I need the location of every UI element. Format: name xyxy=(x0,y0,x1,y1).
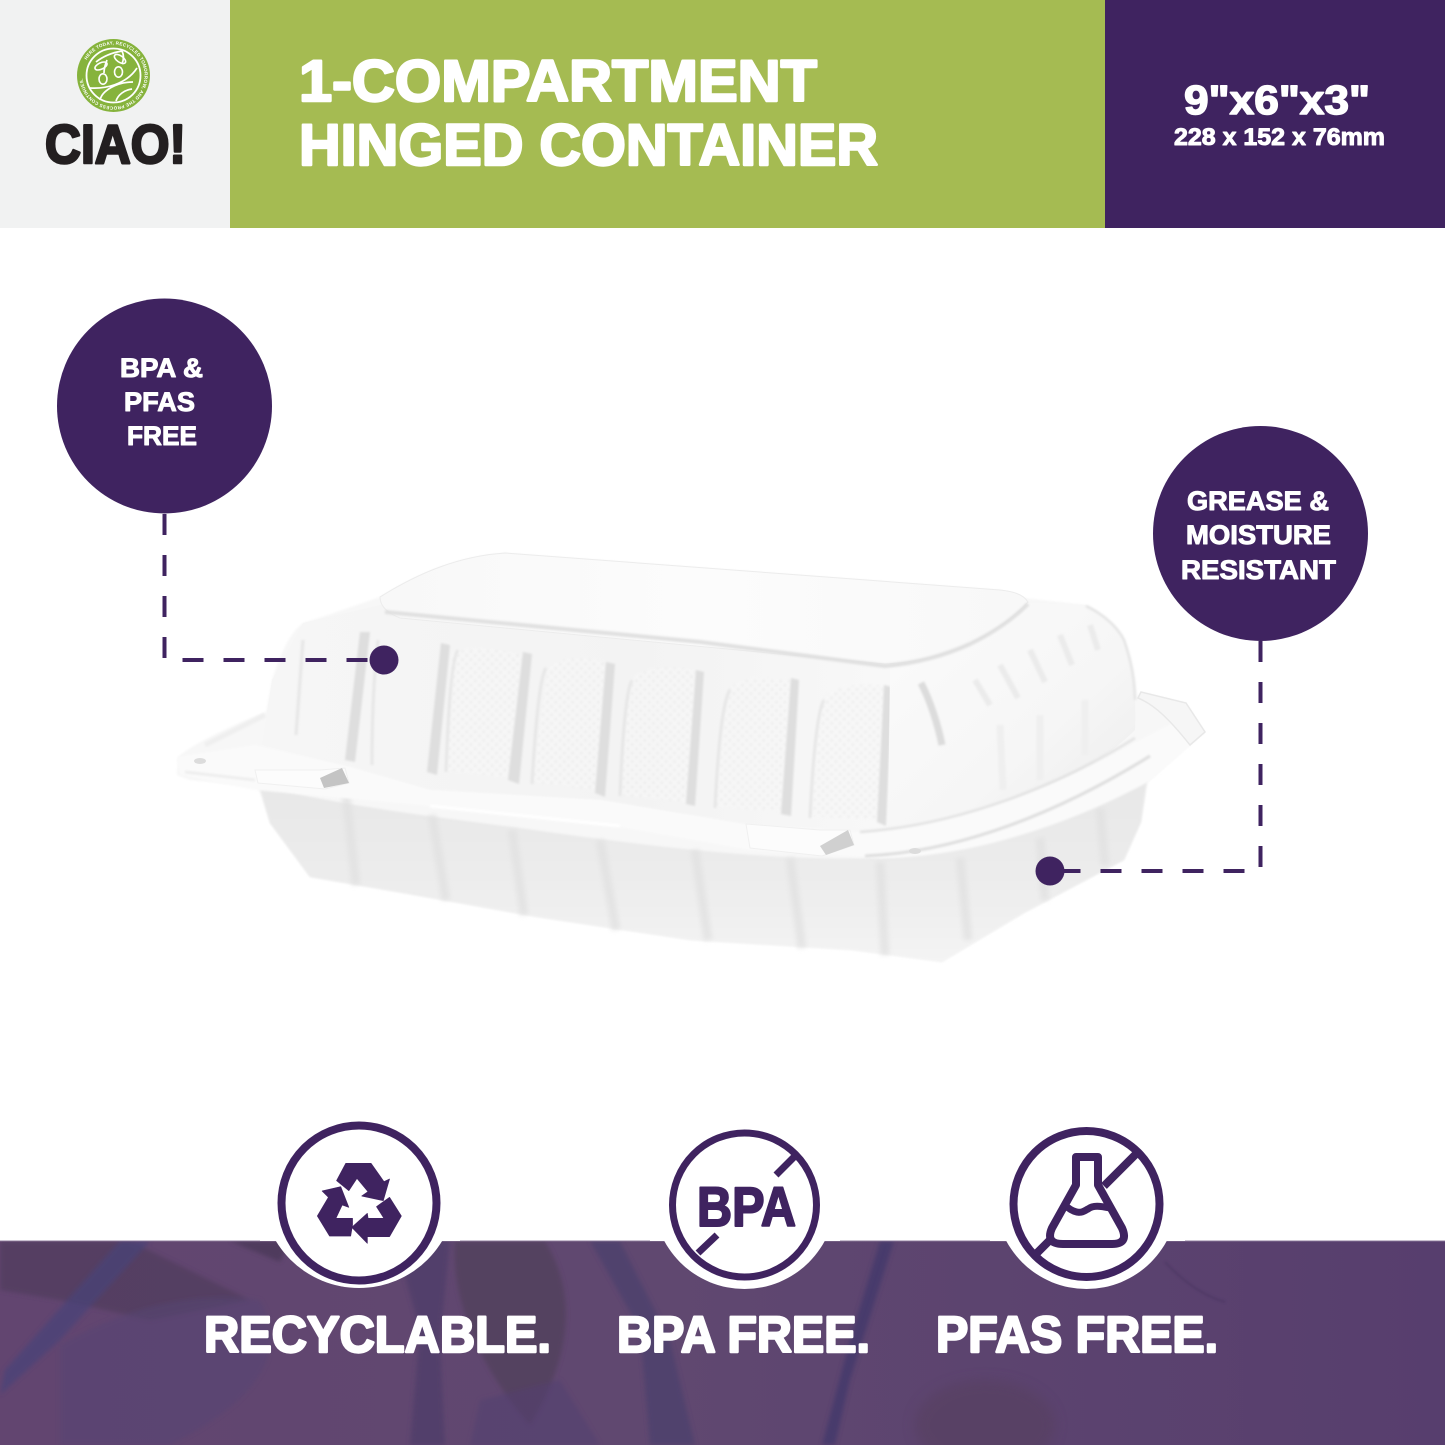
callout text: MOISTURE xyxy=(1186,520,1331,550)
callout text: FREE xyxy=(127,421,197,451)
label: PFAS free: PFAS FREE. xyxy=(936,1306,1218,1363)
leader dot xyxy=(1036,856,1064,886)
lid right end xyxy=(888,603,1135,830)
lid front wall xyxy=(262,605,890,830)
band top hairline xyxy=(0,1240,1445,1241)
badge: PFAS free xyxy=(990,1100,1185,1289)
badge halo xyxy=(996,1107,1178,1289)
label: BPA free: BPA FREE. xyxy=(617,1306,870,1363)
icon: olive seal logo: HERE TODAY, RECYCLED TOMORROW, AND THE PROCESS CONTINUES. xyxy=(80,41,148,110)
callout text: PFAS xyxy=(124,387,195,417)
callout text: RESISTANT xyxy=(1181,555,1337,585)
silhouette xyxy=(177,553,1205,962)
dimensions in inches: 9"x6"x3" xyxy=(1184,77,1370,123)
callout: grease and moisture resistant xyxy=(1036,426,1368,886)
icon: recycling arrows xyxy=(317,1163,401,1243)
rim shading xyxy=(185,715,1150,856)
lid ribs xyxy=(345,632,892,826)
logo wordmark: CIAO! xyxy=(45,113,186,175)
dimensions in millimetres: 228 x 152 x 76mm xyxy=(1174,124,1385,151)
right flange edge xyxy=(1138,692,1205,745)
icon: prohibition slash xyxy=(698,1154,797,1253)
footer band with leaf background xyxy=(0,1241,1445,1445)
lid top lower lip xyxy=(385,604,1028,666)
badge halo xyxy=(262,1094,456,1288)
rim band xyxy=(177,716,1205,858)
icon text: BPA: BPA xyxy=(697,1175,796,1238)
left hinge tab xyxy=(255,768,349,789)
callout: BPA and PFAS free xyxy=(57,298,398,674)
callout text xyxy=(1181,486,1337,585)
textured panels xyxy=(446,648,884,820)
callout badge xyxy=(1153,426,1368,641)
right hinge tab xyxy=(746,824,854,856)
icon: crossed-out flask xyxy=(1037,1153,1137,1253)
callout text: GREASE & xyxy=(1187,486,1329,516)
logo panel xyxy=(0,0,230,228)
badge: BPA free xyxy=(650,1100,840,1289)
badge halo xyxy=(654,1107,836,1289)
callout badge xyxy=(57,298,272,514)
title: HINGED CONTAINER xyxy=(299,113,878,178)
leader dot xyxy=(370,646,398,674)
tray ribs xyxy=(346,795,1105,955)
label: recyclable: RECYCLABLE. xyxy=(204,1306,551,1363)
badge: recyclable xyxy=(260,1094,460,1288)
lid flat top xyxy=(380,553,1028,664)
right end embossed detail xyxy=(921,606,1135,790)
header bar xyxy=(0,0,1445,228)
title xyxy=(299,49,878,178)
leader line xyxy=(1050,641,1260,871)
panel arcs xyxy=(296,640,824,818)
badge ring xyxy=(672,1133,816,1277)
leader line xyxy=(164,514,384,660)
lower tray xyxy=(258,772,1148,962)
title: 1-COMPARTMENT xyxy=(299,49,817,114)
badge ring xyxy=(282,1126,436,1280)
dimensions panel xyxy=(1105,0,1445,228)
callout text xyxy=(120,353,203,451)
badge ring xyxy=(1014,1131,1160,1277)
title panel xyxy=(230,0,1105,228)
product image: hinged container xyxy=(177,553,1205,962)
callout text: BPA & xyxy=(120,353,203,383)
vent holes xyxy=(194,758,206,764)
